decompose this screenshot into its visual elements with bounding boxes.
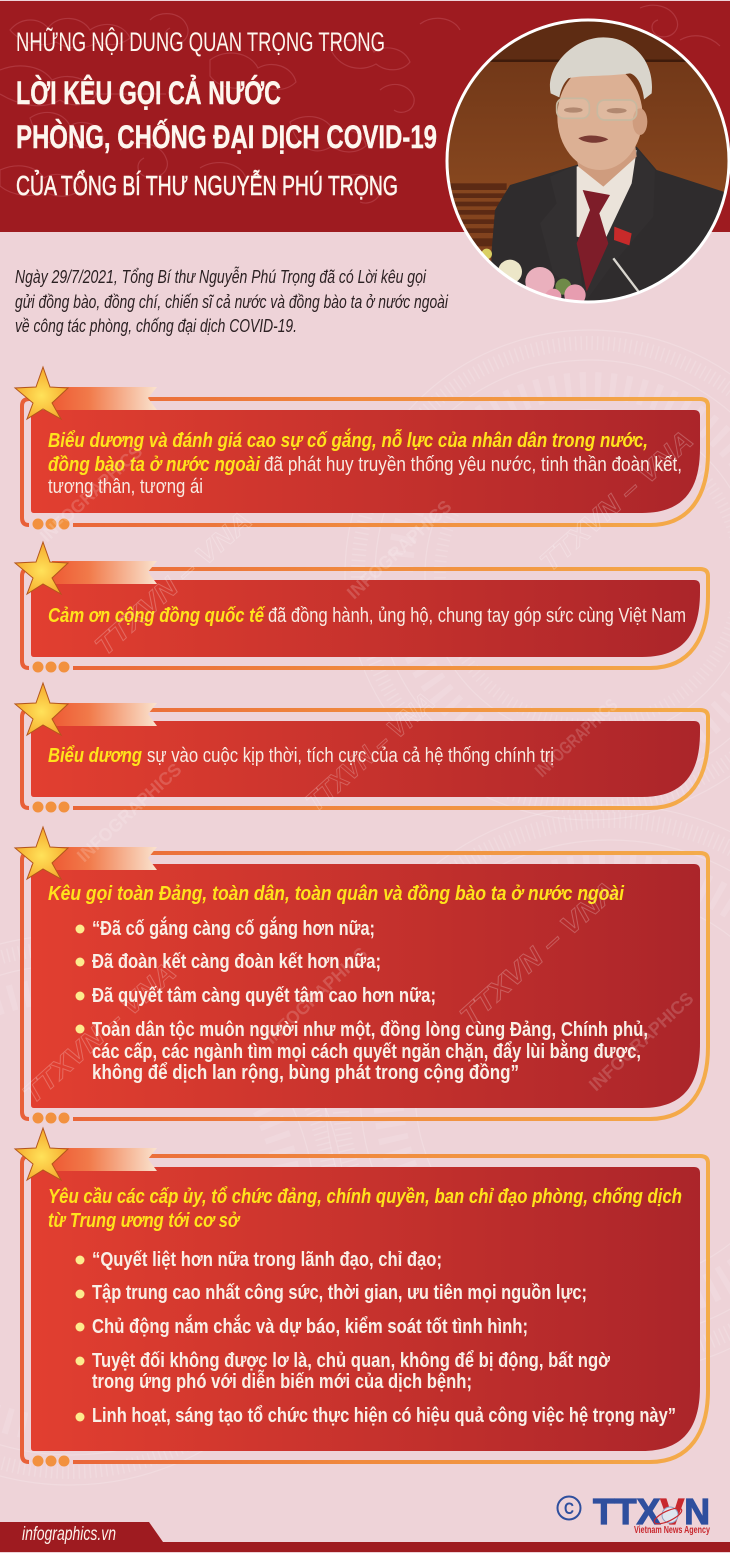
card 4 bullet list: “Đã cố gắng càng cố gắng hơn nữa; bbox=[92, 916, 375, 940]
card 4 frame bbox=[22, 853, 708, 1119]
logo: TTXVN Vietnam News Agency bbox=[558, 1491, 710, 1536]
card 5 star bbox=[15, 1128, 68, 1180]
watermarks: TTXVN – VNA bbox=[534, 425, 699, 577]
intro paragraph: Ngày 29/7/2021, Tổng Bí thư Nguyễn Phú Trọng đã có Lời kêu gọi bbox=[15, 266, 427, 287]
intro paragraph bbox=[15, 266, 449, 336]
card 2 text: Cảm ơn cộng đồng quốc tế bbox=[48, 604, 266, 627]
card 4 bullet list: Đã quyết tâm càng quyết tâm cao hơn nữa; bbox=[92, 985, 436, 1007]
card 1 background bbox=[31, 410, 700, 513]
panel: card 4 call to the nation bbox=[15, 827, 708, 1124]
title block bbox=[16, 26, 437, 201]
card 5 heading bbox=[48, 1185, 682, 1232]
card 3 text: sự vào cuộc kịp thời, tích cực của cả hệ thống chính trị bbox=[147, 745, 554, 767]
card 2 ribbon bbox=[52, 561, 157, 584]
card 1 text bbox=[48, 429, 682, 498]
panel: card 5 requests to party committees bbox=[15, 1128, 708, 1466]
footer site label: infographics.vn bbox=[22, 1524, 116, 1545]
card 3 text: Biểu dương bbox=[48, 744, 142, 767]
card 3 background bbox=[31, 721, 700, 797]
card 2 star bbox=[15, 542, 68, 594]
watermarks: INFOGRAPHICS bbox=[585, 988, 697, 1095]
card 1 text: đồng bào ta ở nước ngoài bbox=[48, 453, 261, 476]
agency wordmark: TTXVN bbox=[593, 1491, 710, 1532]
watermarks: INFOGRAPHICS bbox=[261, 943, 371, 1048]
header band bbox=[0, 1, 730, 232]
panel: card 3 commendation of political system bbox=[15, 683, 708, 812]
background drum patterns bbox=[0, 330, 730, 1485]
card 5 ribbon bbox=[52, 1148, 157, 1171]
card 5 bullet list: Tập trung cao nhất công sức, thời gian, ưu tiên mọi nguồn lực; bbox=[92, 1282, 587, 1304]
card 5 background bbox=[31, 1167, 700, 1451]
card 5 bullet list: Chủ động nắm chắc và dự báo, kiểm soát tốt tình hình; bbox=[92, 1314, 528, 1338]
copyright mark: C bbox=[564, 1499, 574, 1518]
card 3 text bbox=[48, 744, 554, 767]
panel: card 2 thanks to international community bbox=[15, 542, 708, 672]
watermarks: INFOGRAPHICS bbox=[73, 759, 185, 866]
title kicker: NHỮNG NỘI DUNG QUAN TRỌNG TRONG bbox=[16, 26, 385, 57]
watermarks: INFOGRAPHICS bbox=[36, 441, 146, 546]
intro paragraph: gửi đồng bào, đồng chí, chiến sĩ cả nước và đồng bào ta ở nước ngoài bbox=[15, 291, 449, 312]
card 3 frame bbox=[22, 710, 708, 808]
card 1 star bbox=[15, 367, 68, 419]
card 2 dots bbox=[32, 662, 70, 672]
main title line 2: PHÒNG, CHỐNG ĐẠI DỊCH COVID-19 bbox=[16, 119, 437, 155]
card 5 bullet list bbox=[76, 1249, 676, 1427]
globe emblem bbox=[652, 1505, 684, 1527]
watermarks bbox=[17, 425, 699, 1109]
card 5 bullet list: Tuyệt đối không được lơ là, chủ quan, không để bị động, bất ngờ bbox=[92, 1350, 611, 1372]
card 5 heading: từ Trung ương tới cơ sở bbox=[48, 1209, 241, 1232]
card 2 frame bbox=[22, 569, 708, 668]
card 1 dots bbox=[32, 518, 70, 530]
card 4 bullet list bbox=[76, 916, 648, 1084]
watermarks: INFOGRAPHICS bbox=[343, 496, 455, 603]
card 4 ribbon bbox=[52, 847, 157, 870]
card 1 ribbon bbox=[52, 387, 157, 410]
card 2 background bbox=[31, 580, 700, 657]
watermarks: TTXVN – VNA bbox=[454, 875, 623, 1031]
card 2 text bbox=[48, 604, 686, 627]
card 4 background bbox=[31, 864, 700, 1108]
card 4 dots bbox=[32, 1112, 70, 1124]
card 3 dots bbox=[32, 802, 70, 812]
card 5 frame bbox=[22, 1156, 708, 1462]
watermarks: TTXVN – VNA bbox=[300, 687, 440, 817]
panel: card 1 commendation of people bbox=[15, 367, 708, 530]
card 4 bullet list: không để dịch lan rộng, bùng phát trong cộng đồng” bbox=[92, 1062, 519, 1084]
card 3 ribbon bbox=[52, 703, 157, 726]
card 5 bullet list: trong ứng phó với diễn biến mới của dịch bệnh; bbox=[92, 1369, 472, 1393]
card 1 text: tương thân, tương ái bbox=[48, 476, 203, 498]
main title line 1: LỜI KÊU GỌI CẢ NƯỚC bbox=[16, 75, 281, 111]
watermarks: TTXVN – VNA bbox=[89, 505, 258, 661]
copyright mark bbox=[558, 1496, 580, 1520]
card 1 frame bbox=[22, 399, 708, 525]
watermarks: TTXVN – VNA bbox=[17, 957, 182, 1109]
intro paragraph: về công tác phòng, chống đại dịch COVID-19. bbox=[15, 315, 297, 336]
card 3 star bbox=[15, 683, 68, 735]
watermarks: INFOGRAPHICS bbox=[531, 695, 622, 781]
card 5 dots bbox=[32, 1456, 70, 1466]
card 5 bullet list: “Quyết liệt hơn nữa trong lãnh đạo, chỉ đạo; bbox=[92, 1249, 442, 1271]
card 4 bullet list: Đã đoàn kết càng đoàn kết hơn nữa; bbox=[92, 951, 381, 973]
card 4 star bbox=[15, 827, 68, 879]
portrait photo bbox=[447, 19, 730, 306]
card 4 heading: Kêu gọi toàn Đảng, toàn dân, toàn quân và đồng bào ta ở nước ngoài bbox=[48, 882, 625, 905]
title subline: CỦA TỔNG BÍ THƯ NGUYỄN PHÚ TRỌNG bbox=[16, 169, 398, 201]
footer band bbox=[0, 1522, 730, 1552]
